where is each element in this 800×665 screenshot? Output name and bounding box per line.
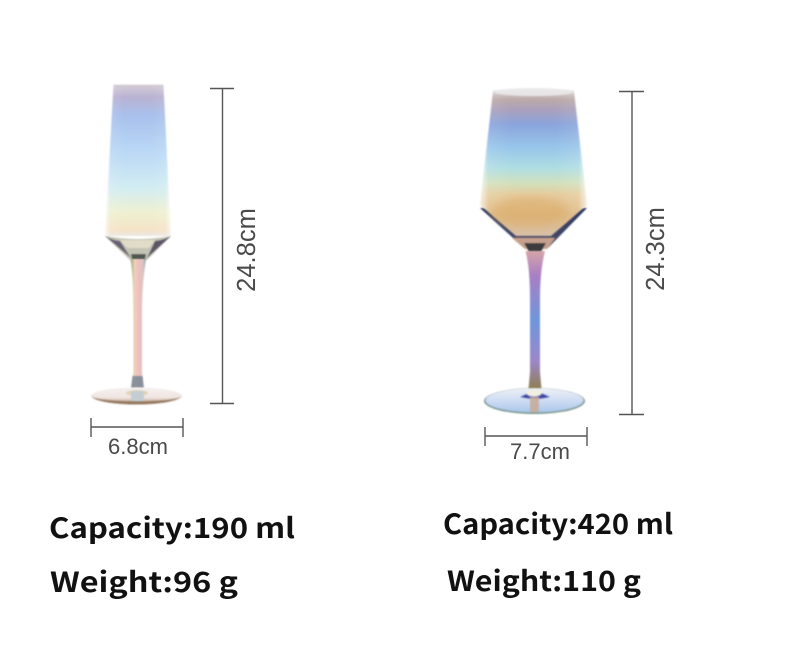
wine glass illustration [480, 88, 587, 414]
wine width dimension [485, 427, 587, 464]
width label: 7.7cm [510, 439, 570, 464]
flute stem [130, 259, 146, 388]
height label: 24.3cm [642, 207, 670, 291]
wine bowl colour wash [492, 197, 568, 227]
wine weight: Weight:110 g [447, 560, 641, 600]
width line [91, 418, 183, 437]
flute capacity: Capacity:190 ml [49, 507, 295, 547]
flute width dimension [91, 418, 183, 459]
wine stem [526, 251, 545, 389]
width line [485, 427, 587, 446]
height label: 24.8cm [233, 208, 261, 292]
flute glass illustration [91, 85, 182, 404]
flute cone base [105, 236, 171, 260]
width label: 6.8cm [108, 434, 168, 459]
height line [210, 88, 234, 404]
wine bowl [480, 89, 587, 236]
flute height dimension [210, 88, 261, 404]
wine foot [484, 388, 585, 414]
wine height dimension [619, 91, 670, 414]
flute bowl [105, 85, 171, 236]
wine capacity: Capacity:420 ml [443, 503, 673, 543]
flute weight: Weight:96 g [50, 561, 238, 601]
flute foot [91, 388, 182, 404]
wine cone base [480, 208, 587, 252]
height line [619, 91, 644, 414]
wine rim [494, 88, 574, 96]
